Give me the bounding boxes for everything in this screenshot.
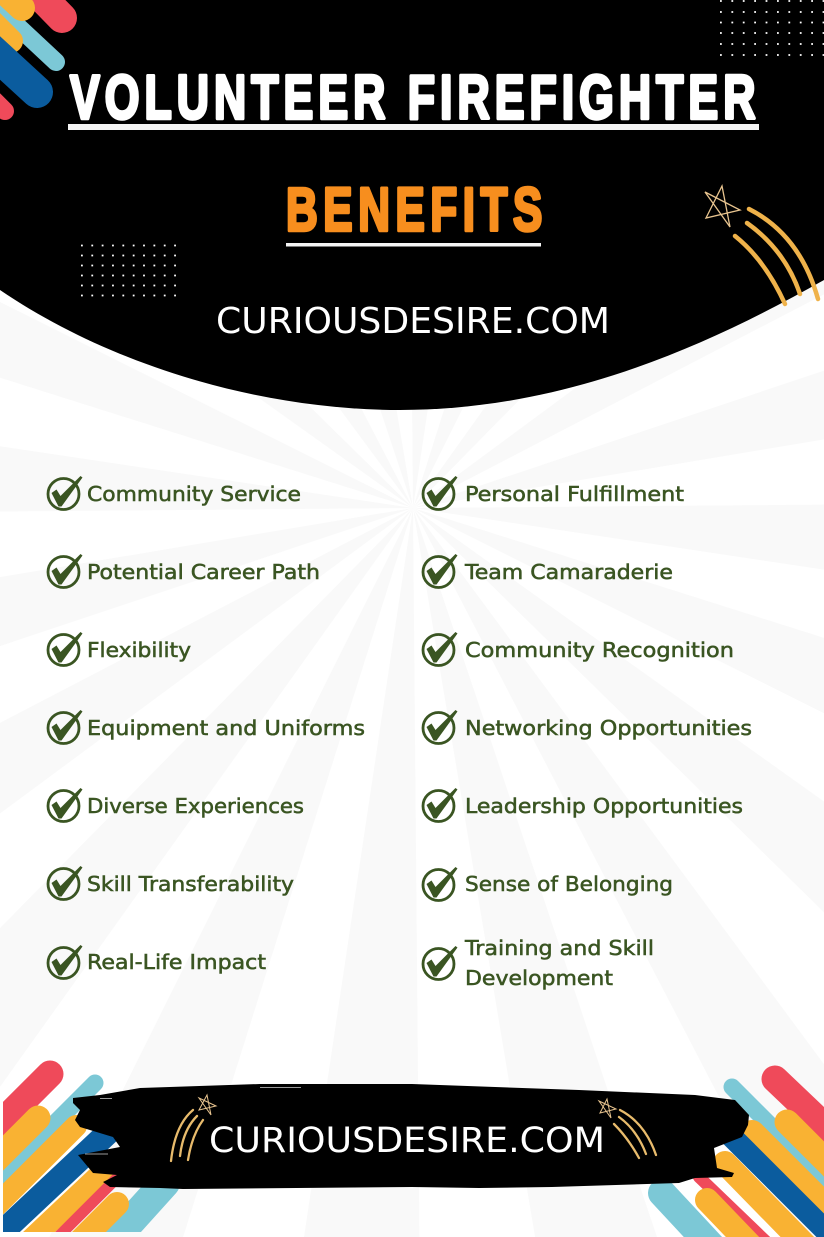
panel: benefits left column	[48, 476, 365, 978]
icon: shooting star banner right	[599, 1099, 656, 1158]
item: Personal Fulfillment	[423, 476, 684, 510]
item: Potential Career Path: Potential Career Path	[87, 560, 320, 584]
item: Real-Life Impact: Real-Life Impact	[87, 950, 266, 974]
decoration: top-left coloured stripes	[0, 0, 62, 111]
item: Training and Skill Development: Development	[465, 966, 613, 990]
heading underline	[286, 243, 541, 246]
title underline	[68, 124, 759, 130]
decoration: right dot grid	[720, 1, 824, 55]
website label: header: CURIOUSDESIRE.COM	[216, 301, 610, 342]
panel: black header with curved bottom	[0, 0, 824, 410]
item: Diverse Experiences: Diverse Experiences	[87, 794, 304, 818]
item: Real-Life Impact	[48, 945, 266, 978]
item: Training and Skill Development: Training and Skill	[464, 936, 654, 960]
item: Sense of Belonging	[423, 867, 673, 900]
item: Diverse Experiences	[48, 788, 304, 822]
item: Flexibility	[48, 632, 191, 666]
item: Training and Skill Development	[423, 936, 654, 990]
item: Community Service	[48, 476, 301, 510]
panel: black brush banner	[73, 1084, 749, 1189]
item: Leadership Opportunities: Leadership Opportunities	[465, 794, 743, 818]
decoration: bottom-left coloured stripes	[0, 1074, 165, 1237]
item: Skill Transferability: Skill Transferability	[87, 872, 294, 896]
item: Personal Fulfillment: Personal Fulfillment	[465, 482, 684, 506]
item: Networking Opportunities	[423, 710, 752, 744]
item: Potential Career Path	[48, 554, 320, 588]
item: Community Recognition: Community Recognition	[465, 638, 734, 662]
item: Skill Transferability	[48, 866, 294, 900]
decoration: bottom-right coloured stripes	[662, 1079, 824, 1237]
item: Leadership Opportunities	[423, 788, 743, 822]
icon: shooting star banner left	[171, 1095, 216, 1161]
item: Flexibility: Flexibility	[87, 638, 191, 662]
item: Networking Opportunities: Networking Opportunities	[465, 716, 752, 740]
item: Equipment and Uniforms: Equipment and Uniforms	[87, 716, 365, 740]
panel: benefits right column	[423, 476, 752, 990]
item: Team Camaraderie	[423, 554, 673, 588]
decoration: left dot grid	[81, 246, 176, 296]
icon: shooting star top right	[705, 186, 818, 304]
item: Sense of Belonging: Sense of Belonging	[465, 872, 673, 896]
heading: Benefits: BENEFITS	[286, 177, 542, 244]
item: Community Service: Community Service	[87, 482, 301, 506]
website label: banner: CURIOUSDESIRE.COM	[209, 1121, 605, 1161]
title: Volunteer Firefighter: VOLUNTEER FIREFIGHTER	[70, 63, 755, 132]
item: Community Recognition	[423, 632, 734, 666]
item: Team Camaraderie: Team Camaraderie	[464, 560, 673, 584]
item: Equipment and Uniforms	[48, 710, 365, 744]
